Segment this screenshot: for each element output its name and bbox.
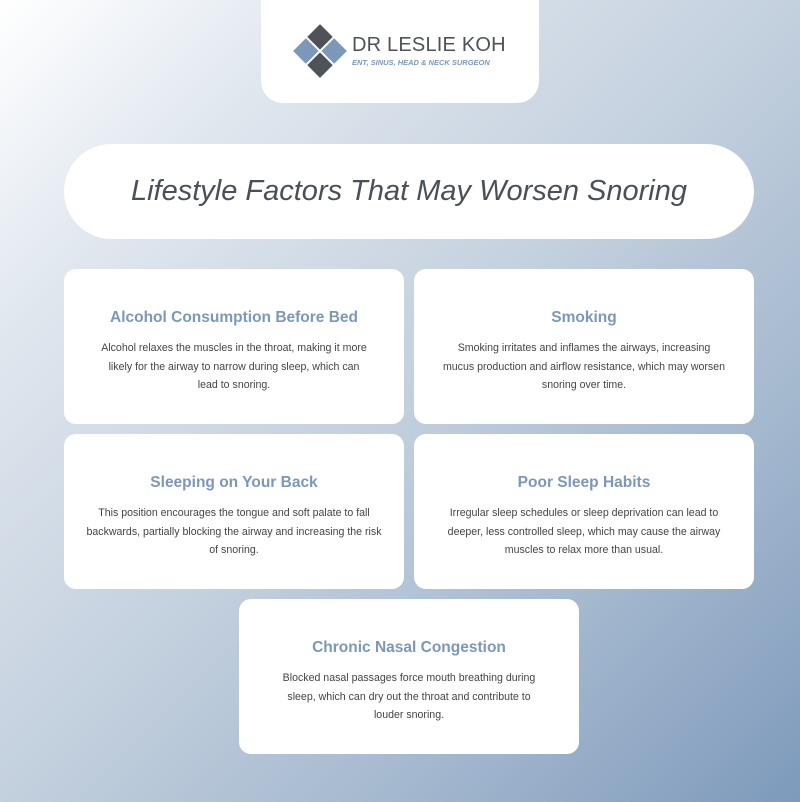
card: alcohol: lead to snoring. bbox=[198, 379, 270, 391]
card: back sleeping bbox=[64, 434, 404, 589]
card: sleep habits: Poor Sleep Habits bbox=[518, 474, 650, 491]
logo text bbox=[352, 34, 506, 67]
logo text: DR LESLIE KOH bbox=[352, 34, 506, 56]
card: nasal congestion: louder snoring. bbox=[374, 709, 444, 721]
card: alcohol: Alcohol Consumption Before Bed bbox=[110, 309, 358, 326]
card: sleep habits: muscles to relax more than usual. bbox=[505, 544, 663, 556]
card: alcohol: likely for the airway to narrow during sleep, which can bbox=[109, 360, 359, 372]
card: nasal congestion: sleep, which can dry out the throat and contribute to bbox=[287, 690, 531, 702]
card: alcohol bbox=[64, 269, 404, 424]
card: back sleeping: backwards, partially blocking the airway and increasing the risk bbox=[86, 526, 382, 538]
card: smoking bbox=[414, 269, 754, 424]
title pill: Lifestyle Factors That May Worsen Snoring bbox=[131, 175, 687, 207]
logo icon bbox=[293, 24, 347, 78]
card: smoking: snoring over time. bbox=[542, 379, 626, 391]
card: back sleeping: This position encourages the tongue and soft palate to fall bbox=[98, 507, 370, 519]
card: sleep habits: Irregular sleep schedules or sleep deprivation can lead to bbox=[450, 507, 718, 519]
logo text: ENT, SINUS, HEAD & NECK SURGEON bbox=[352, 58, 490, 67]
card: nasal congestion bbox=[239, 599, 579, 754]
card: smoking: mucus production and airflow resistance, which may worsen bbox=[443, 360, 725, 372]
card: smoking: Smoking bbox=[551, 309, 617, 326]
card: back sleeping: of snoring. bbox=[209, 544, 259, 556]
card: sleep habits bbox=[414, 434, 754, 589]
card: smoking: Smoking irritates and inflames the airways, increasing bbox=[458, 342, 710, 354]
card: sleep habits: deeper, less controlled sleep, which may cause the airway bbox=[448, 526, 720, 538]
card: alcohol: Alcohol relaxes the muscles in the throat, making it more bbox=[101, 342, 367, 354]
header logo box bbox=[261, 0, 539, 103]
title pill bbox=[64, 144, 754, 239]
card: nasal congestion: Chronic Nasal Congestion bbox=[312, 639, 506, 656]
card: back sleeping: Sleeping on Your Back bbox=[150, 474, 318, 491]
card: nasal congestion: Blocked nasal passages force mouth breathing during bbox=[283, 672, 535, 684]
